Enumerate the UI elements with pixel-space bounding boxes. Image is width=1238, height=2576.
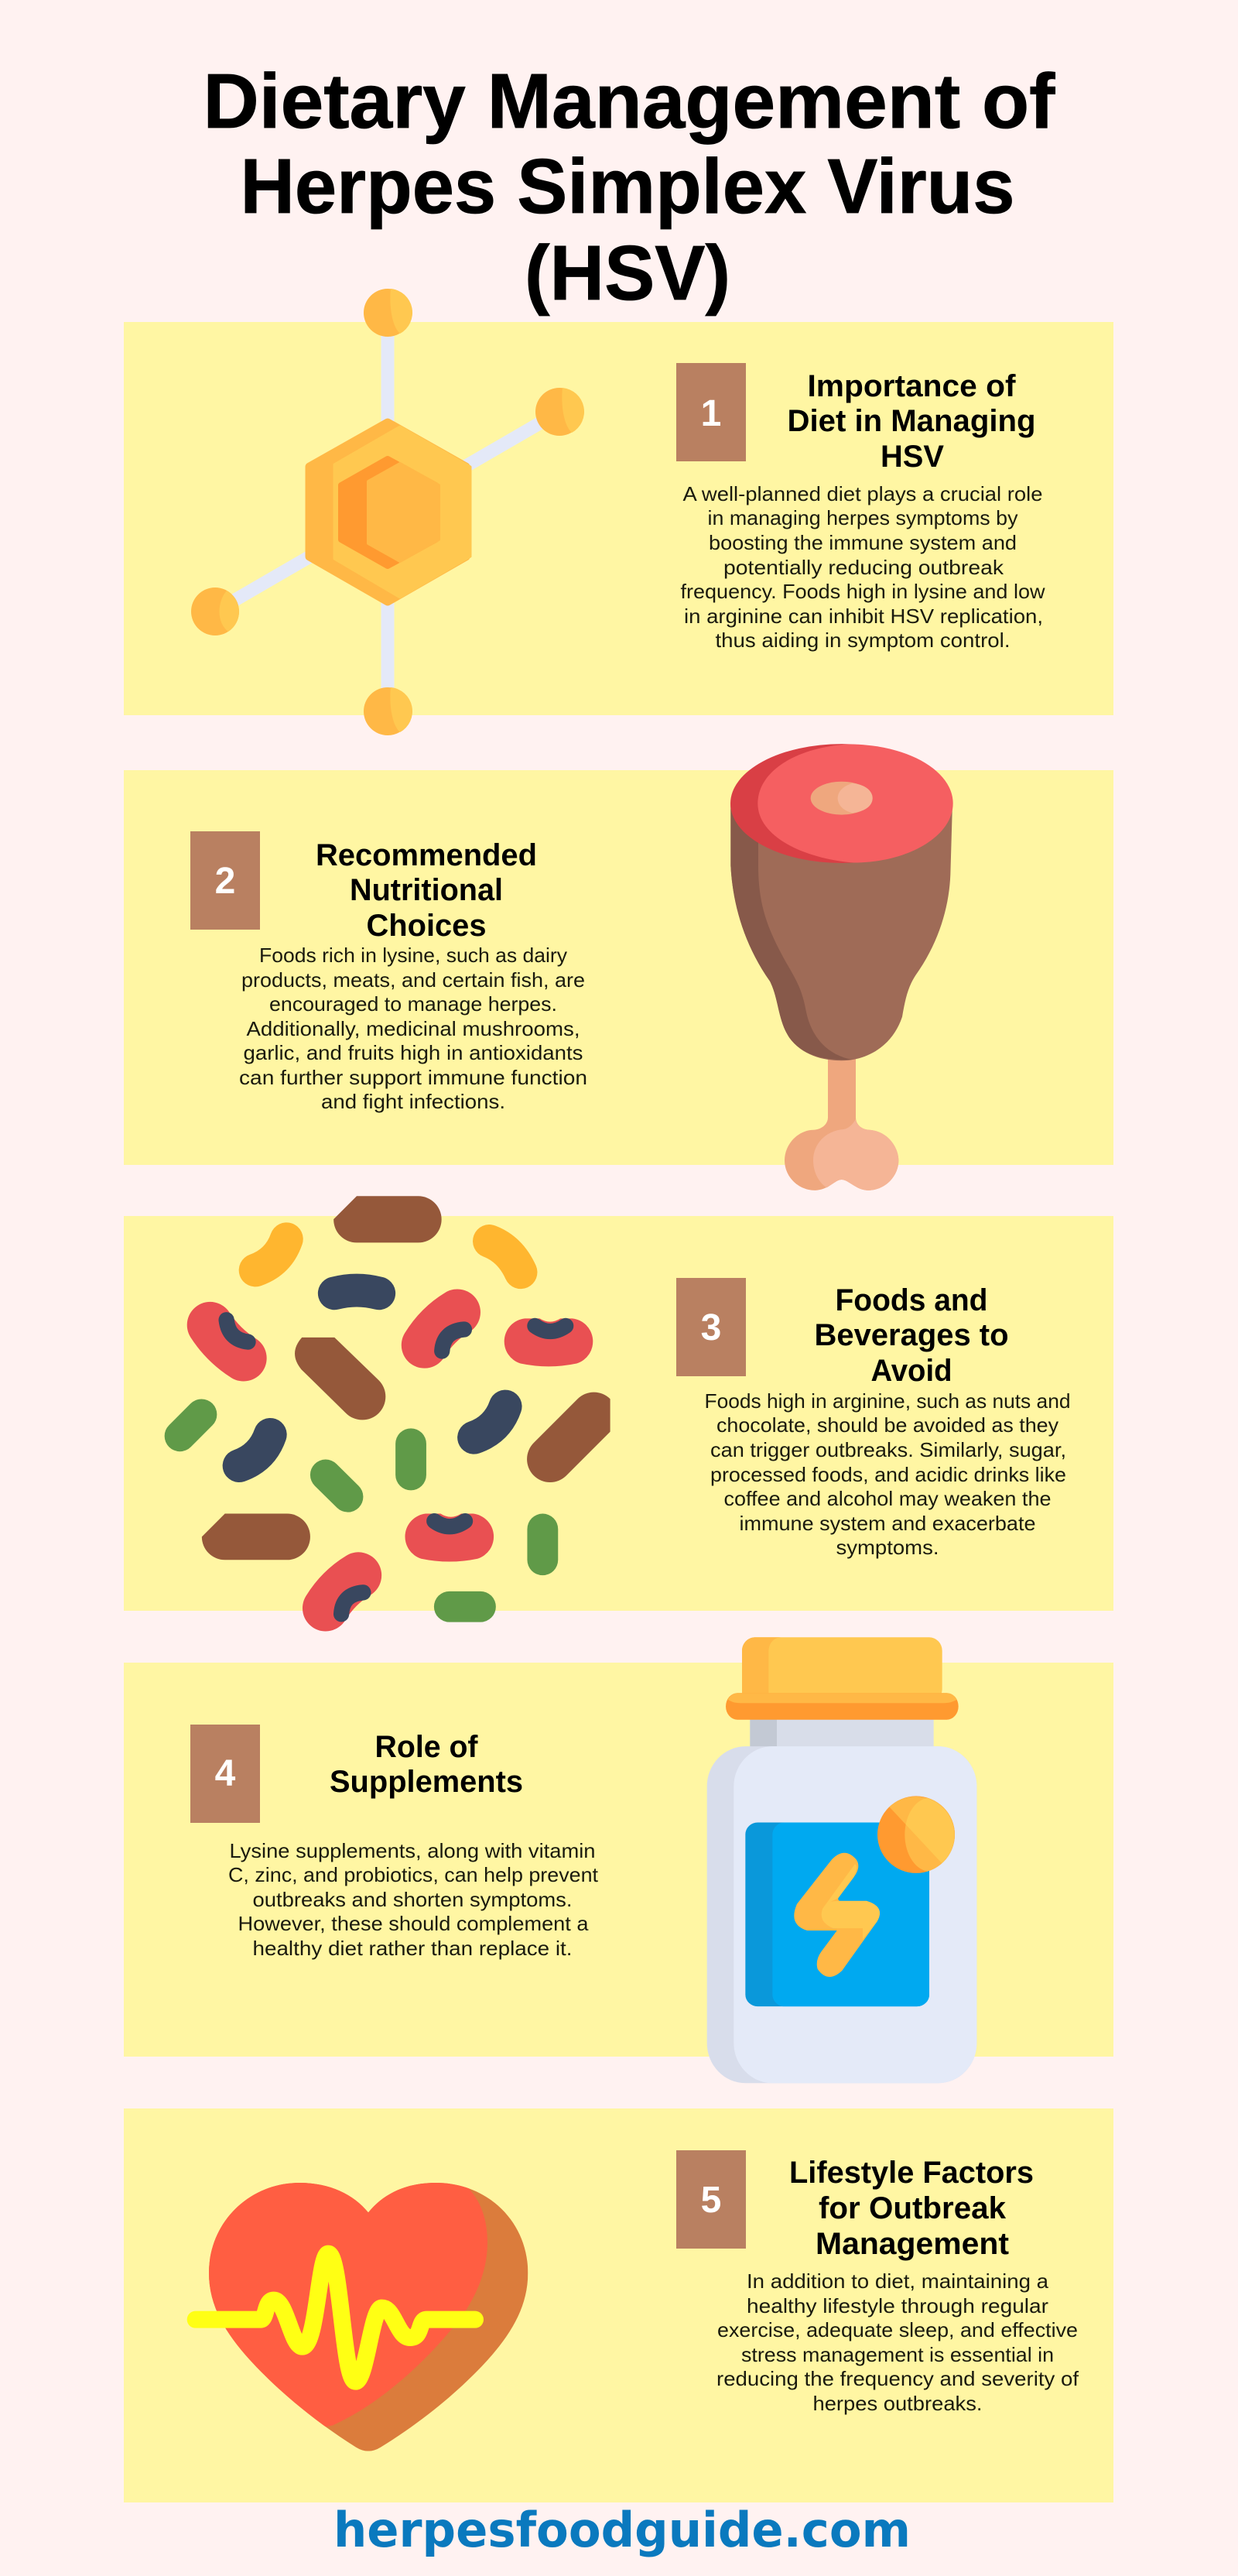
icon: molecule [191, 289, 584, 735]
panel: lifestyle factors [124, 2108, 1113, 2502]
body text 1 [681, 482, 1045, 652]
number badge 3 [676, 1278, 746, 1376]
title: Herpes Simplex Virus [240, 143, 1015, 230]
heading 5: for Outbreak [819, 2191, 1007, 2225]
heading 5: Lifestyle Factors [789, 2156, 1034, 2190]
title: Dietary Management of [203, 58, 1055, 145]
body text 3: can trigger outbreaks. Similarly, sugar, [710, 1438, 1066, 1461]
panel: importance of diet [124, 289, 1113, 735]
number badge 2: 2 [215, 861, 235, 902]
body text 2 [239, 944, 587, 1113]
body text 3: Foods high in arginine, such as nuts and [704, 1389, 1071, 1413]
number badge 3: 3 [701, 1307, 721, 1348]
heading 2: Choices [367, 909, 486, 943]
body text 3: processed foods, and acidic drinks like [710, 1463, 1066, 1486]
heading 4: Supplements [330, 1765, 523, 1799]
heading 3: Foods and [836, 1283, 987, 1317]
body text 5: healthy lifestyle through regular [747, 2294, 1048, 2317]
body text 1: potentially reducing outbreak [723, 556, 1004, 579]
body text 2: encouraged to manage herpes. [269, 992, 557, 1016]
body text 2: and fight infections. [321, 1090, 505, 1113]
heading 2 [316, 838, 537, 943]
body text 5 [716, 2269, 1079, 2415]
body text 2: can further support immune function [239, 1066, 587, 1089]
body text 3: immune system and exacerbate [740, 1512, 1035, 1535]
body text 1: A well-planned diet plays a crucial role [682, 482, 1043, 505]
number badge 4: 4 [215, 1753, 236, 1794]
body text 2: garlic, and fruits high in antioxidants [243, 1041, 583, 1064]
body text 3 [704, 1389, 1071, 1559]
heading 2: Recommended [316, 838, 537, 872]
icon: supplement bottle [707, 1637, 976, 2083]
heading 1 [788, 369, 1035, 474]
heading 4 [330, 1730, 523, 1799]
number badge 2 [190, 831, 260, 930]
title [203, 58, 1055, 317]
body text 5: reducing the frequency and severity of [716, 2367, 1079, 2390]
body text 3: coffee and alcohol may weaken the [724, 1487, 1051, 1510]
body text 3: symptoms. [836, 1536, 939, 1559]
body text 4: Lysine supplements, along with vitamin [229, 1839, 596, 1862]
panel: role of supplements [124, 1637, 1113, 2083]
body text 4: However, these should complement a [238, 1912, 589, 1935]
number badge 4 [190, 1725, 260, 1823]
body text 1: frequency. Foods high in lysine and low [681, 580, 1045, 603]
body text 3: chocolate, should be avoided as they [716, 1413, 1058, 1437]
body text 4: C, zinc, and probiotics, can help prevent [228, 1863, 599, 1886]
heading 3 [814, 1283, 1009, 1388]
panel: foods and beverages to avoid [124, 1196, 1113, 1622]
number badge 5 [676, 2150, 746, 2249]
body text 5: In addition to diet, maintaining a [747, 2269, 1049, 2293]
icon: meat drumstick [730, 744, 953, 1190]
title: (HSV) [525, 230, 730, 317]
number badge 1: 1 [701, 393, 721, 434]
body text 1: in managing herpes symptoms by [707, 506, 1018, 529]
heading 3: Beverages to [814, 1318, 1009, 1352]
body text 2: Additionally, medicinal mushrooms, [246, 1017, 580, 1040]
heading 1: Diet in Managing [788, 404, 1035, 438]
number badge 5: 5 [701, 2180, 721, 2221]
body text 4: healthy diet rather than replace it. [252, 1937, 573, 1960]
heading 4: Role of [374, 1730, 478, 1764]
heading 5 [789, 2156, 1034, 2261]
footer website: herpesfoodguide.com [333, 2502, 911, 2558]
body text 4 [228, 1839, 599, 1960]
body text 1: boosting the immune system and [709, 531, 1017, 554]
icon: heart with pulse [196, 2177, 534, 2459]
heading 1: Importance of [808, 369, 1016, 403]
heading 3: Avoid [871, 1354, 952, 1388]
heading 5: Management [816, 2227, 1009, 2261]
body text 5: stress management is essential in [741, 2343, 1054, 2366]
body text 2: products, meats, and certain fish, are [241, 968, 585, 992]
heading 1: HSV [881, 440, 944, 474]
panel: recommended nutritional choices [124, 744, 1113, 1190]
body text 5: herpes outbreaks. [812, 2392, 983, 2415]
body text 1: in arginine can inhibit HSV replication, [684, 605, 1043, 628]
icon: beans [180, 1196, 594, 1622]
body text 4: outbreaks and shorten symptoms. [252, 1888, 573, 1911]
number badge 1 [676, 363, 746, 461]
body text 2: Foods rich in lysine, such as dairy [259, 944, 567, 967]
body text 5: exercise, adequate sleep, and effective [717, 2318, 1078, 2341]
heading 2: Nutritional [350, 873, 503, 907]
body text 1: thus aiding in symptom control. [715, 629, 1011, 652]
